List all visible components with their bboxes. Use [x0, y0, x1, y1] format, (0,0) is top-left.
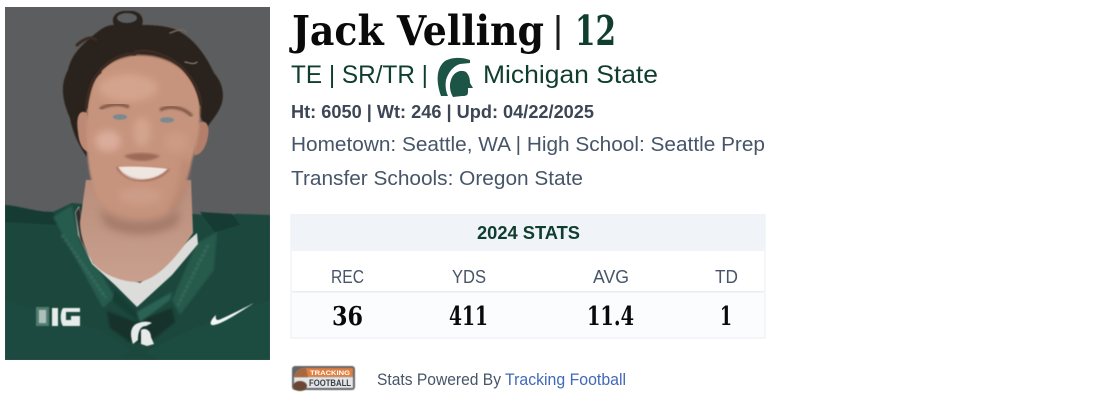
player name and number: Jack Velling	[289, 7, 544, 55]
column labels	[331, 266, 738, 287]
forehead highlight	[98, 74, 158, 102]
ears	[77, 112, 90, 152]
position, class and school: Michigan State	[483, 61, 658, 89]
nose shadow	[124, 153, 160, 161]
icon: spartan helmet	[438, 58, 473, 97]
icon: tracking football logo: FOOTBALL	[309, 378, 351, 388]
hometown and high school: Hometown: Seattle, WA | High School: Seattle Prep	[291, 133, 765, 156]
stat values: 36	[332, 302, 363, 332]
jersey swoosh	[211, 303, 254, 325]
panel: 2024 stats table	[291, 214, 765, 338]
jersey	[5, 203, 270, 360]
stat values: 1	[720, 302, 732, 332]
column labels: YDS	[452, 266, 486, 287]
table header	[291, 214, 765, 251]
loop cutout in hair	[117, 13, 137, 23]
player name and number: 12	[575, 7, 616, 55]
attribution line: Tracking Football	[505, 371, 626, 389]
undershirt	[75, 206, 198, 307]
eyes	[113, 114, 127, 120]
smile	[118, 167, 168, 180]
chin and jaw shadow	[100, 208, 180, 234]
icon: tracking football logo: TRACKING	[310, 371, 350, 377]
transfer schools: Transfer Schools: Oregon State	[291, 167, 583, 190]
stat values	[292, 291, 764, 338]
collar	[53, 205, 217, 342]
hair wisps	[77, 30, 201, 108]
stat values: 411	[449, 302, 488, 332]
height, weight and update date: Ht: 6050 | Wt: 246 | Upd: 04/22/2025	[291, 102, 594, 122]
column labels: TD	[715, 266, 738, 287]
column labels: REC	[331, 266, 364, 287]
Big Ten patch	[36, 307, 80, 326]
column labels: AVG	[593, 266, 629, 287]
icon: tracking football logo	[292, 366, 355, 391]
neck	[80, 180, 193, 282]
player photo	[5, 7, 270, 360]
stat values: 11.4	[587, 302, 634, 332]
attribution line: Stats Powered By	[377, 371, 502, 389]
hair back	[63, 11, 223, 157]
jersey spartan	[131, 322, 154, 346]
table header: 2024 STATS	[477, 223, 580, 243]
position, class and school	[291, 58, 658, 97]
face	[86, 55, 200, 220]
attribution line	[377, 371, 626, 389]
position, class and school: TE | SR/TR |	[291, 61, 428, 89]
eyebrows	[100, 105, 129, 109]
